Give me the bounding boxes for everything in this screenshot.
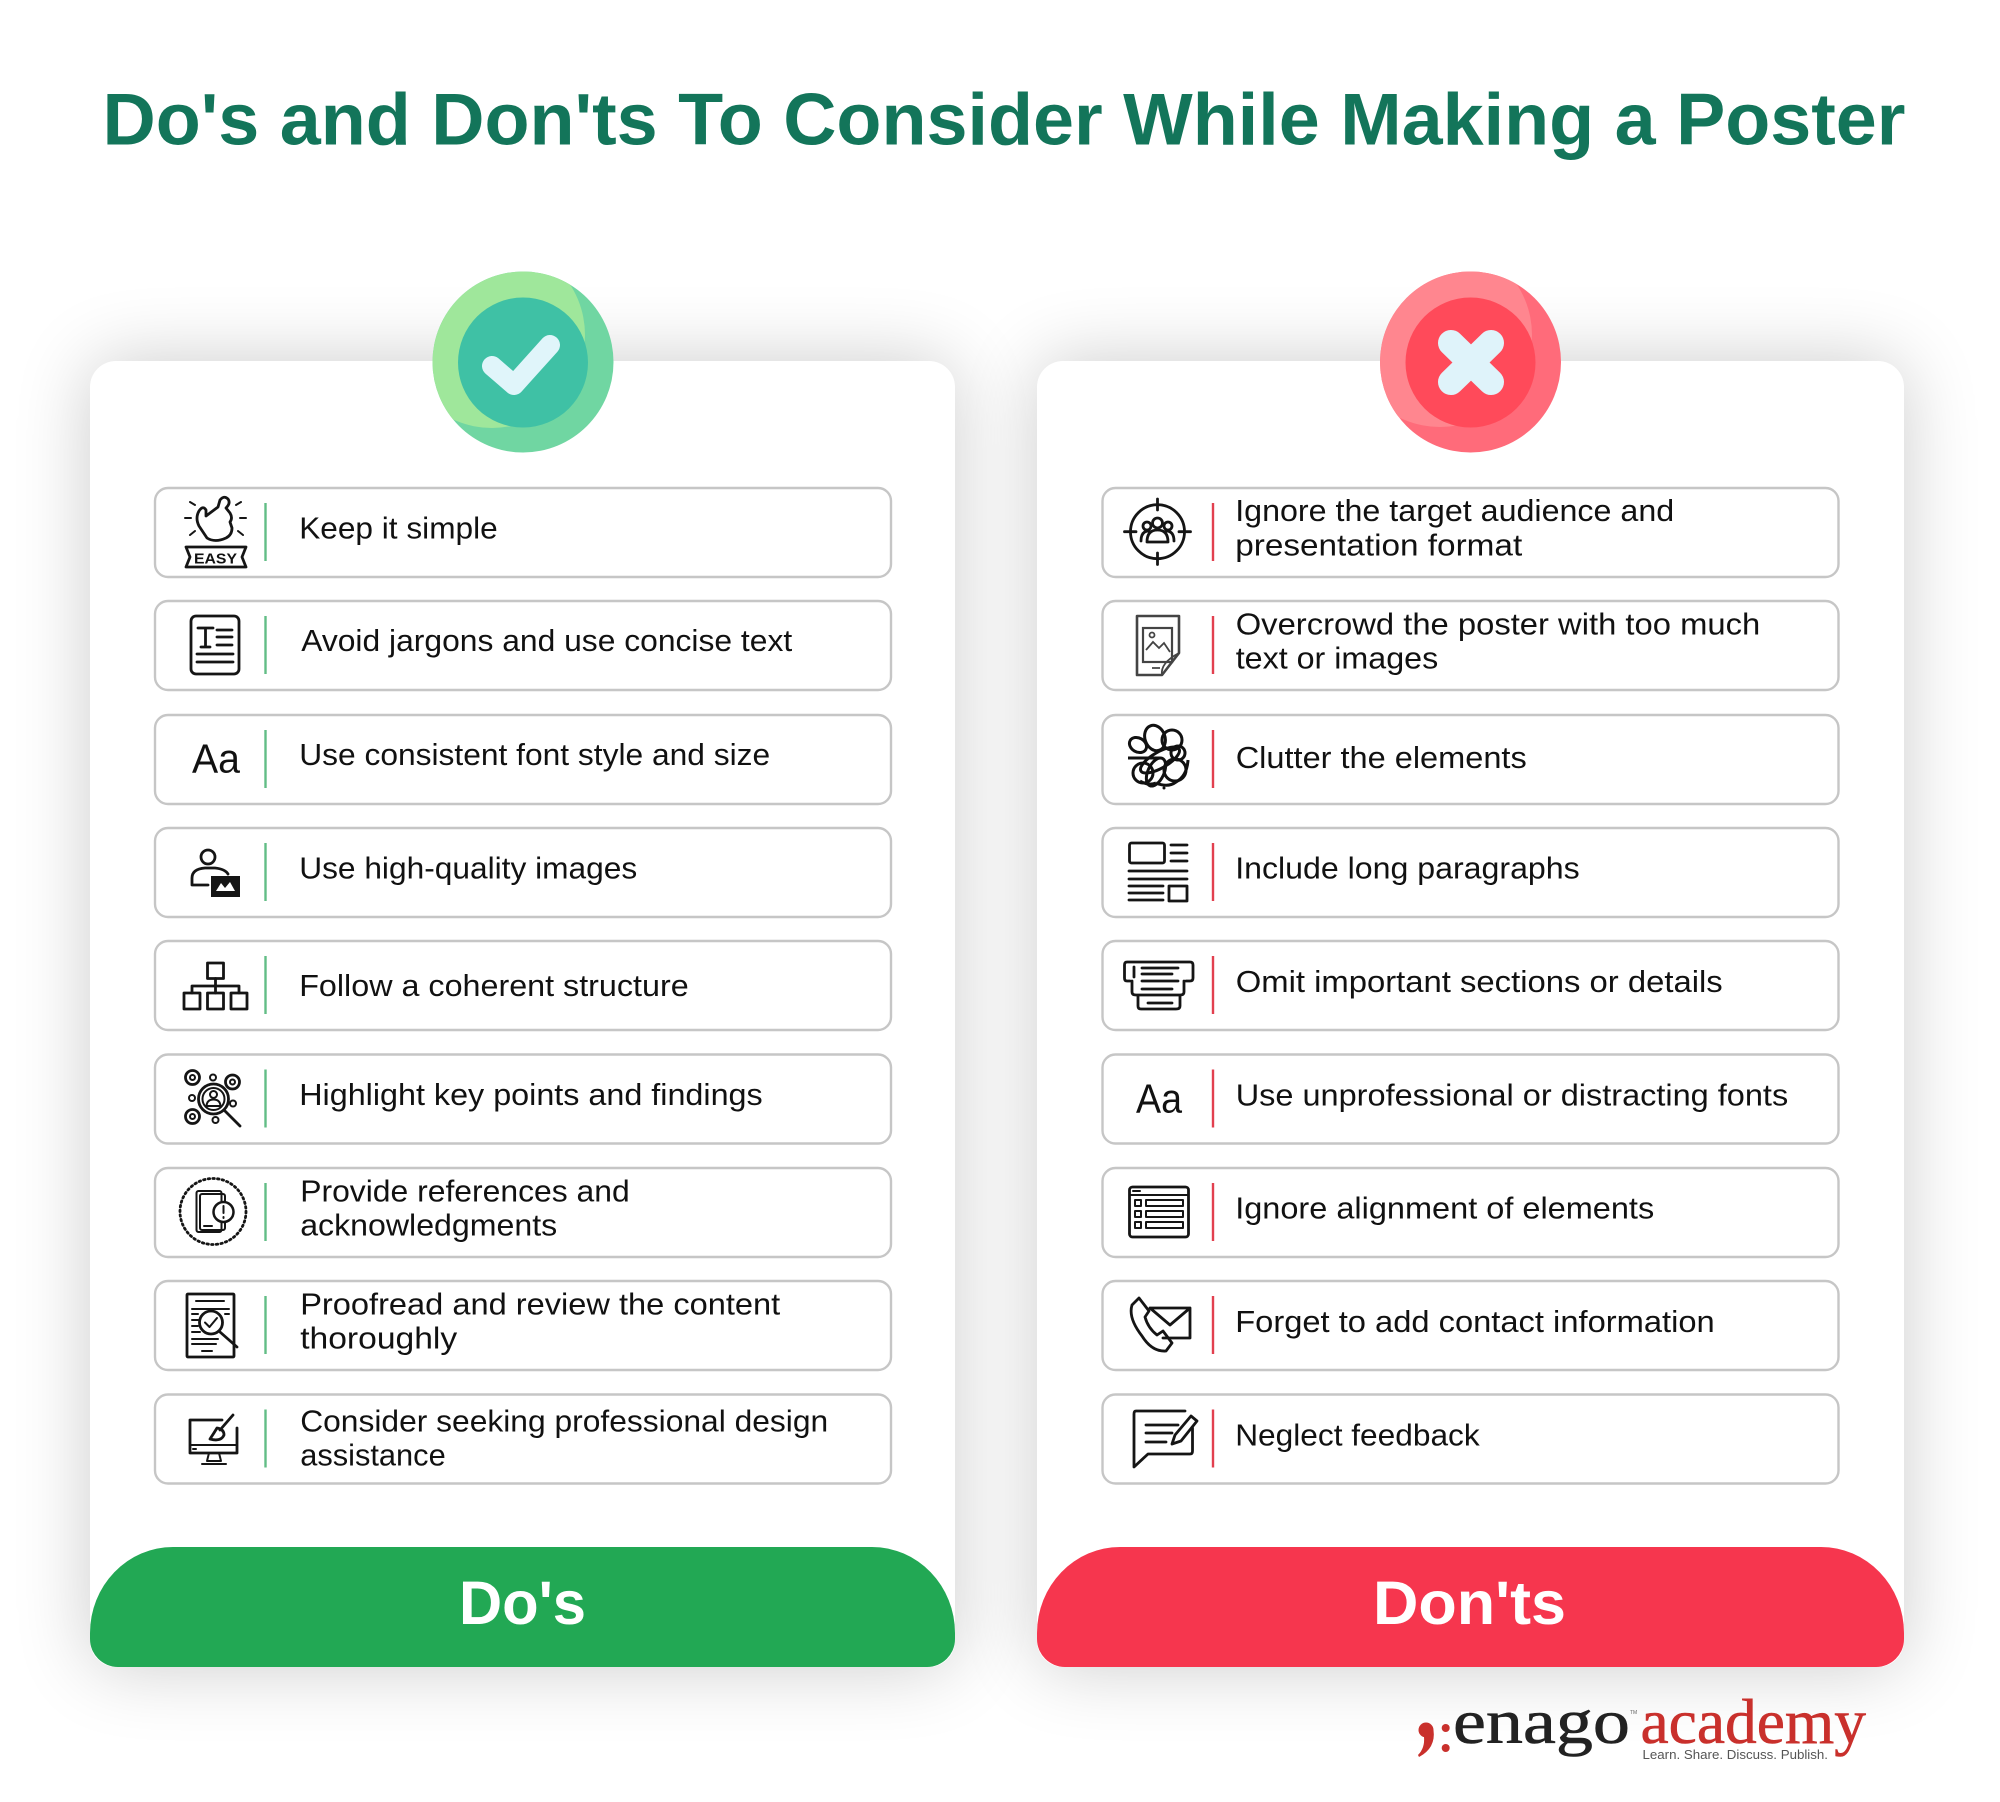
text: Overcrowd the poster with too much (1236, 608, 1760, 642)
row: keep it simple (155, 488, 891, 577)
text: Neglect feedback (1235, 1419, 1480, 1453)
text: Highlight key points and findings (299, 1078, 763, 1112)
panel: don'ts (1037, 243, 1904, 1667)
row: high-quality images (155, 828, 891, 917)
icon: text document (191, 616, 239, 674)
panel: do's (90, 242, 955, 1667)
footer band: do's: Do's (459, 1569, 586, 1637)
text: Include long paragraphs (1235, 852, 1580, 886)
text: Keep it simple (299, 512, 498, 546)
text: Proofread and review the content (300, 1288, 781, 1322)
icon: page layout (1129, 843, 1187, 901)
icon: org chart (184, 963, 247, 1009)
row: contact information (1102, 1281, 1838, 1370)
text: Avoid jargons and use concise text (301, 624, 793, 658)
icon: window list (1130, 1187, 1188, 1237)
row: long paragraphs (1102, 828, 1838, 917)
row: omit sections (1102, 941, 1838, 1030)
logo: enago academy: TM (1630, 1710, 1637, 1716)
logo: enago academy (1418, 1686, 1866, 1762)
row: target audience: presentation format (1235, 529, 1523, 563)
text: Use unprofessional or distracting fonts (1236, 1079, 1788, 1113)
text: Provide references and (300, 1175, 630, 1209)
icon: dotted circle document (180, 1178, 246, 1244)
icon: feedback bubble (1134, 1411, 1197, 1467)
text: Use high-quality images (299, 852, 637, 886)
text: Use consistent font style and size (299, 738, 770, 772)
row: overcrowd (1102, 601, 1838, 690)
text: Omit important sections or details (1236, 965, 1723, 999)
logo: enago academy: Learn. Share. Discuss. Publish. (1642, 1748, 1828, 1762)
row: references: acknowledgments (300, 1209, 557, 1243)
row: design assistance: assistance (300, 1439, 446, 1473)
logo: enago academy: academy (1640, 1686, 1866, 1757)
row: references (155, 1168, 891, 1257)
row: neglect feedback (1102, 1394, 1838, 1484)
icon: easy hand: EASY (194, 550, 237, 568)
row: proofread: thoroughly (300, 1322, 458, 1356)
icon: poster (1137, 616, 1179, 675)
icon: monitor with brush (190, 1415, 237, 1464)
badge: green check (432, 272, 614, 452)
icon: document review (187, 1294, 237, 1357)
icon: stacked list (1124, 962, 1193, 1009)
logo: enago academy: enago (1453, 1686, 1630, 1757)
icon: phone and envelope (1131, 1298, 1190, 1351)
row: target audience (1102, 488, 1838, 577)
row: consistent font (155, 715, 891, 804)
row: overcrowd: text or images (1236, 642, 1438, 676)
row: ignore alignment (1102, 1168, 1838, 1257)
icon: Aa: Aa (1136, 1076, 1182, 1122)
row: avoid jargons (155, 601, 891, 690)
row: key points (155, 1054, 891, 1144)
badge: red cross (1380, 272, 1561, 452)
icon: scribble (1127, 722, 1188, 790)
text: Ignore the target audience and (1235, 494, 1674, 528)
row: proofread (155, 1281, 891, 1370)
row: clutter (1102, 715, 1838, 804)
row: unprofessional fonts (1102, 1054, 1838, 1144)
icon: person with image (192, 850, 240, 897)
icon: Aa: Aa (192, 736, 240, 782)
icon: search network (186, 1070, 240, 1126)
text: Forget to add contact information (1235, 1305, 1715, 1339)
title: Do's and Don'ts To Consider While Making a Poster (102, 80, 1906, 160)
footer band: don'ts (1037, 1547, 1904, 1667)
icon: red semicolon mark (1418, 1722, 1450, 1757)
row: design assistance (155, 1394, 891, 1484)
row: coherent structure (155, 941, 891, 1030)
icon: easy hand (185, 497, 246, 568)
icon: audience target (1124, 499, 1190, 564)
text: Clutter the elements (1236, 741, 1527, 775)
text: Follow a coherent structure (299, 969, 689, 1003)
text: Consider seeking professional design (300, 1405, 828, 1439)
text: Ignore alignment of elements (1235, 1192, 1654, 1226)
footer band: do's (90, 1547, 955, 1667)
footer band: don'ts: Don'ts (1373, 1569, 1566, 1637)
